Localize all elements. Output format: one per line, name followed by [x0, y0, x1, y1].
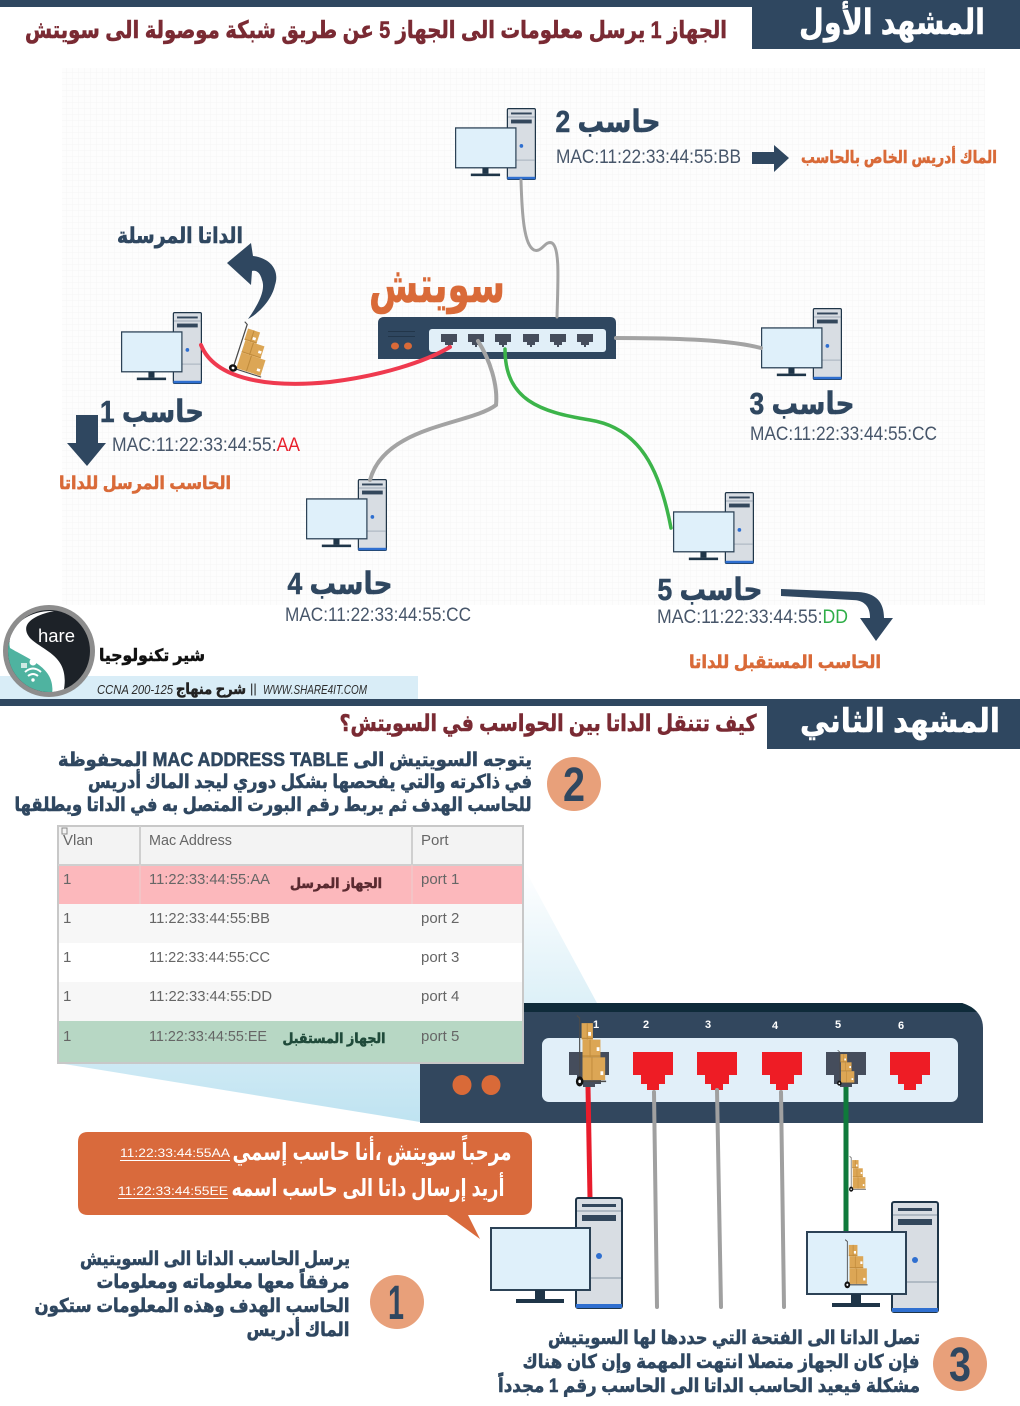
diagram background — [62, 68, 985, 605]
scene two header bar — [0, 699, 1020, 706]
step 3 text: تصل الداتا الى الفتحة التي حددها لها السويتيش — [548, 1328, 920, 1349]
logo — [3, 605, 95, 697]
sender computer large — [491, 1198, 622, 1308]
zoom funnel from table to switch — [58, 866, 597, 1122]
step 3 text: مشكلة فيعيد الحاسب الداتا الى الحاسب رقم 1 مجدداً — [498, 1372, 920, 1397]
big switch: 5 — [835, 1019, 841, 1031]
speech callout: 11:22:33:44:55EE — [118, 1184, 228, 1198]
step 3 text — [498, 1328, 920, 1397]
big switch: 6 — [898, 1020, 904, 1032]
network switch — [378, 317, 616, 359]
MAC address table: 1 — [63, 910, 71, 927]
step 2 text: في ذاكرته والتي يفحصها بشكل دوري ليجد الماك أدريس — [88, 769, 532, 794]
speech callout — [78, 1132, 532, 1239]
scene one badge: المشهد الأول — [799, 0, 985, 43]
step 2 text: يتوجه السويتيش الى MAC ADDRESS TABLE المحفوظة — [58, 750, 532, 771]
top header bar — [0, 0, 1020, 7]
big switch — [420, 1003, 983, 1123]
MAC address table: Port — [421, 832, 449, 849]
scene two badge — [767, 699, 1020, 749]
footer strip: شرح منهاج — [176, 681, 246, 698]
footer strip: CCNA 200-125 — [97, 682, 174, 697]
MAC address table: 11:22:33:44:55:BB — [149, 910, 270, 927]
step 1 text: مرفقاً معها معلوماته ومعلومات — [96, 1268, 350, 1293]
computer 4 — [307, 480, 386, 550]
step 3 number: 3 — [949, 1339, 971, 1392]
scene one subtitle: الجهاز 1 يرسل معلومات الى الجهاز 5 عن طريق شبكة موصولة الى سويتش — [25, 17, 727, 44]
sent data label: الداتا المرسلة — [117, 223, 243, 249]
step 1 number: 1 — [388, 1277, 404, 1330]
step 2 text — [14, 750, 532, 816]
trolley on receiver monitor — [844, 1240, 868, 1288]
footer strip: || — [250, 681, 257, 696]
step 1 text — [34, 1249, 350, 1341]
MAC address table: 1 — [63, 949, 71, 966]
big switch: 3 — [705, 1019, 711, 1031]
big switch: 4 — [772, 1020, 779, 1032]
computer 1 MAC: MAC:11:22:33:44:55:AA — [112, 435, 300, 456]
scene two subtitle: كيف تتنقل الداتا بين الحواسب في السويتش؟ — [340, 710, 757, 737]
MAC address table: port 2 — [421, 910, 459, 927]
step 1 number — [370, 1275, 424, 1330]
computer 2 — [456, 109, 535, 179]
receiver computer large — [807, 1202, 938, 1312]
MAC address table: port 5 — [421, 1028, 459, 1045]
step 3 number — [933, 1337, 987, 1392]
trolley on green cable — [849, 1156, 866, 1192]
computer 3 name: حاسب 3 — [750, 386, 854, 421]
right arrow — [752, 145, 789, 172]
MAC address table: الجهاز المستقبل — [282, 1030, 386, 1047]
MAC address table: 11:22:33:44:55:DD — [149, 988, 272, 1005]
computer 4 name: حاسب 4 — [287, 566, 392, 601]
bent arrow — [781, 589, 893, 641]
receiver label: الحاسب المستقبل للداتا — [689, 652, 881, 672]
MAC address table: 11:22:33:44:55:CC — [149, 949, 270, 966]
trolley in port 5 — [837, 1050, 855, 1086]
footer strip — [0, 676, 418, 699]
computer 1 — [122, 313, 201, 383]
step 3 text: فإن كان الجهاز متصلا انتهت المهمة وإن كان هناك — [522, 1352, 920, 1373]
step 2 number: 2 — [563, 759, 585, 812]
MAC address table: Vlan — [63, 832, 93, 849]
computer 5 MAC: MAC:11:22:33:44:55:DD — [657, 607, 848, 628]
footer strip: WWW.SHARE4IT.COM — [263, 682, 367, 697]
MAC address table: port 3 — [421, 949, 459, 966]
curved arrow to sent data label — [227, 243, 276, 319]
MAC address table: 1 — [63, 988, 71, 1005]
MAC address table: Mac Address — [149, 832, 232, 849]
big switch cables — [588, 1087, 846, 1307]
step 1 text: يرسل الحاسب الداتا الى السويتيش — [80, 1249, 350, 1270]
computer 1 name: حاسب 1 — [100, 394, 204, 429]
speech callout: أريد إرسال داتا الى حاسب اسمه — [232, 1172, 504, 1202]
MAC address table: port 4 — [421, 988, 459, 1005]
step 1 text: الماك أدريس — [246, 1317, 350, 1341]
logo: hare — [38, 626, 75, 646]
brand name: شير تكنولوجيا — [99, 646, 205, 666]
trolley in port 1 — [576, 1016, 606, 1086]
switch label: سويتش — [369, 257, 505, 315]
step 1 text: الحاسب الهدف وهذه المعلومات ستكون — [34, 1296, 350, 1317]
scene one badge — [752, 0, 1020, 49]
sender label: الحاسب المرسل للداتا — [59, 473, 231, 494]
computer 2 MAC: MAC:11:22:33:44:55:BB — [556, 147, 741, 168]
step 2 number — [547, 757, 601, 812]
network cables — [201, 180, 761, 528]
scene two badge: المشهد الثاني — [800, 702, 1000, 741]
computer 4 MAC: MAC:11:22:33:44:55:CC — [285, 605, 471, 626]
computer 5 — [674, 493, 753, 563]
speech callout: 11:22:33:44:55AA — [120, 1146, 230, 1160]
computer 3 MAC: MAC:11:22:33:44:55:CC — [750, 424, 937, 445]
MAC address table — [58, 826, 523, 1063]
speech callout: مرحباً سويتش ،أنا حاسب إسمي — [232, 1135, 512, 1166]
step 2 text: للحاسب الهدف ثم يربط رقم البورت المتصل به في الداتا ويطلقها — [14, 795, 532, 816]
MAC address table: 1 — [63, 871, 71, 888]
data trolley — [228, 321, 276, 381]
down arrow — [67, 415, 106, 466]
computer 3 — [762, 309, 841, 379]
computer 5 name: حاسب 5 — [658, 572, 762, 607]
MAC address table: الجهاز المرسل — [290, 875, 382, 892]
big switch: 1 — [593, 1019, 599, 1031]
big switch: 2 — [643, 1019, 649, 1031]
MAC address table: 11:22:33:44:55:EE — [149, 1028, 267, 1045]
MAC address table: port 1 — [421, 871, 459, 888]
MAC address table: 1 — [63, 1028, 71, 1045]
computer 2 name: حاسب 2 — [556, 104, 660, 139]
MAC address table: 11:22:33:44:55:AA — [149, 871, 270, 888]
